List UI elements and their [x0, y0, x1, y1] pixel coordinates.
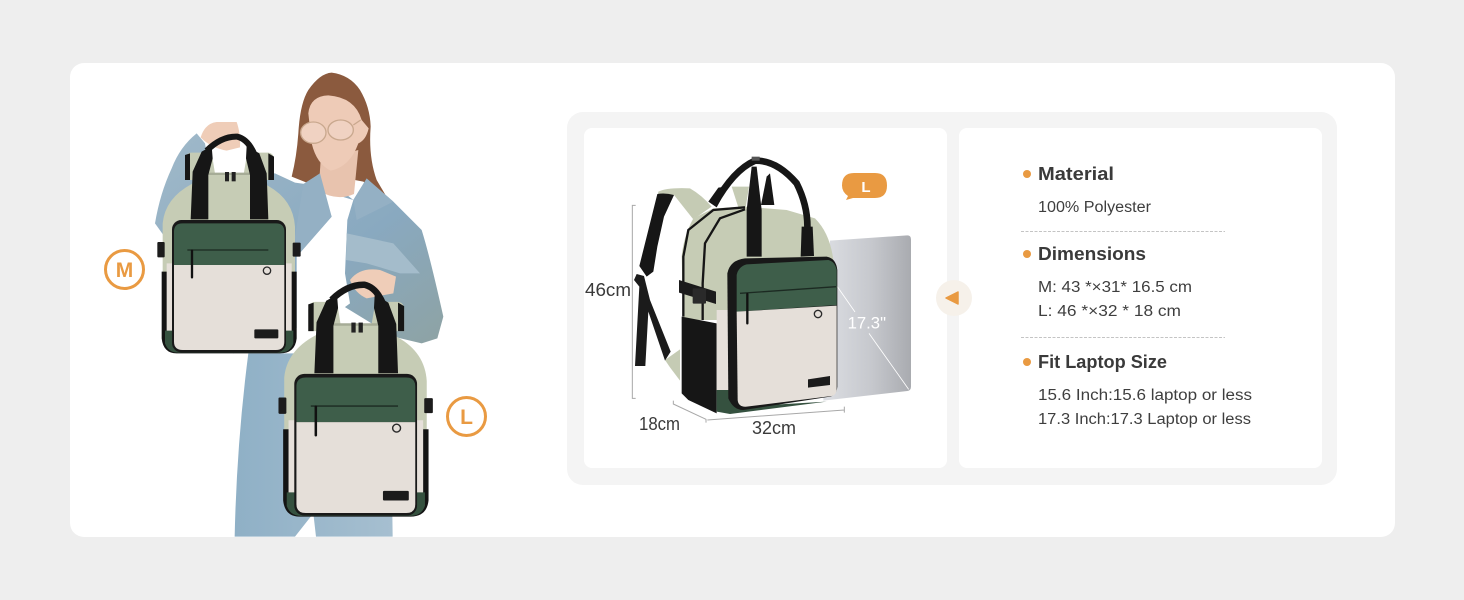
woman: neck [319, 150, 358, 197]
spec: fit laptop size: 17.3 Inch:17.3 Laptop or less [1038, 411, 1251, 428]
label: depth: 18cm [639, 414, 680, 434]
label: height: 46cm [585, 280, 631, 300]
woman: right hand [350, 269, 396, 298]
photo: woman holding two backpacks [155, 73, 443, 537]
panel: specification text [959, 128, 1322, 468]
size tag: L [842, 173, 887, 200]
spec: material: Material [1038, 164, 1114, 184]
arrow between panels [936, 280, 972, 316]
spec: dimensions: Dimensions [1038, 244, 1146, 264]
backpack M [157, 137, 301, 353]
panel: product specifications [567, 112, 1337, 485]
spec: material [1023, 164, 1151, 216]
label: width: 32cm [752, 418, 796, 438]
spec: fit laptop size [1023, 352, 1252, 428]
backpack with measured dimensions [634, 157, 837, 414]
spec: fit laptop size: 15.6 Inch:15.6 laptop or less [1038, 387, 1252, 404]
woman: face [308, 95, 369, 171]
spec: dimensions: M: 43 *×31* 16.5 cm [1038, 279, 1192, 296]
badge: M: M [116, 259, 133, 282]
woman: glasses [301, 120, 361, 143]
label: laptop diagonal: 17.3" [848, 313, 886, 332]
woman: jacket collars [295, 173, 393, 257]
woman: hair [292, 73, 390, 203]
woman: jacket [155, 133, 443, 353]
spec: dimensions [1023, 244, 1192, 320]
woman: t-shirt [297, 190, 353, 333]
badge: L [448, 398, 486, 436]
badge: L: L [460, 406, 473, 429]
badge: M [106, 250, 144, 288]
woman: left hand [201, 122, 240, 151]
spec: fit laptop size: Fit Laptop Size [1038, 352, 1167, 372]
laptop [823, 235, 911, 401]
size tag: L: L [861, 179, 871, 196]
main white card [70, 63, 1395, 537]
backpack L [278, 285, 433, 517]
dimension lines [632, 205, 844, 423]
woman: jacket chest pocket [346, 233, 420, 273]
panel: dimension diagram [584, 128, 947, 468]
spec: dimensions: L: 46 *×32 * 18 cm [1038, 303, 1181, 320]
woman: jeans [235, 353, 393, 537]
spec: material: 100% Polyester [1038, 199, 1151, 216]
